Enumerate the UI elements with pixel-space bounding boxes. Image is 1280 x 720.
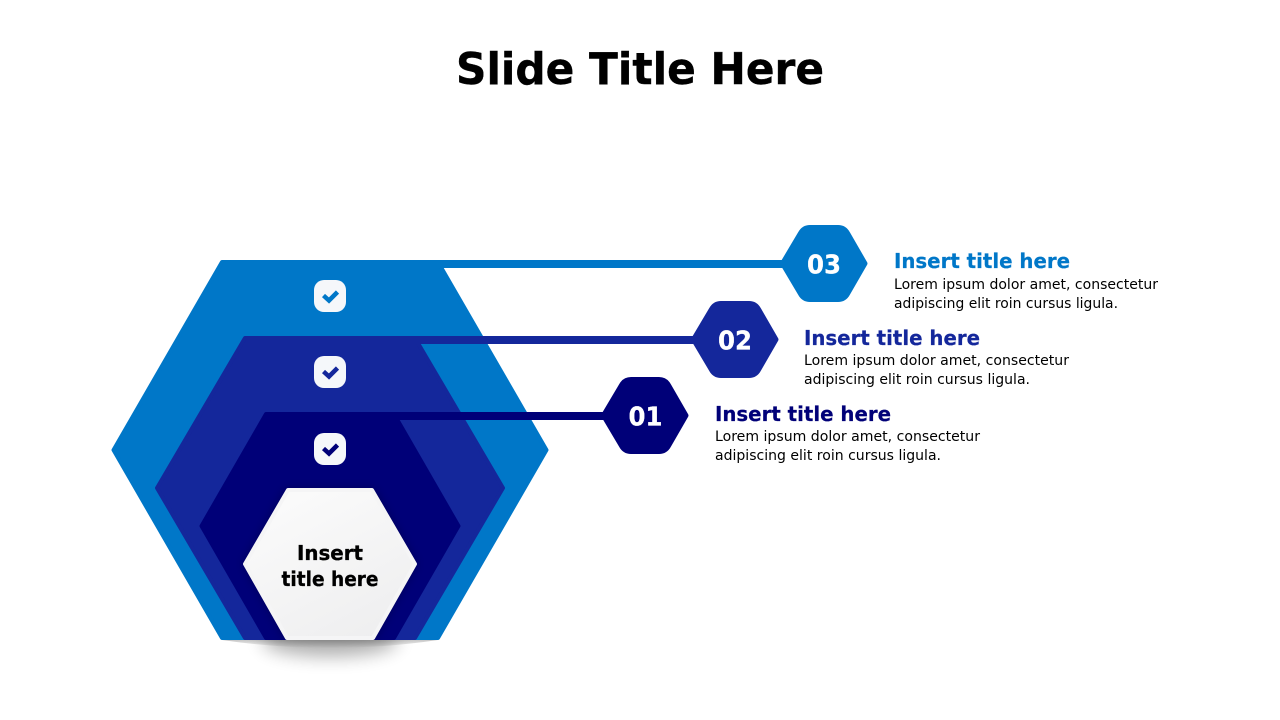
connector 02 xyxy=(410,336,700,344)
layer 02 hexagon xyxy=(157,338,503,638)
center label: Insert xyxy=(297,541,363,565)
connector 03 xyxy=(430,260,790,268)
body 02: adipiscing elit roin cursus ligula. xyxy=(804,372,1030,388)
icon: check 01 xyxy=(314,433,346,465)
layer 01 hexagon xyxy=(202,414,458,638)
item 02 xyxy=(410,301,1069,388)
item 01 xyxy=(390,377,980,464)
layer 03 hexagon xyxy=(114,262,546,638)
connector 01 xyxy=(390,412,610,420)
center hexagon xyxy=(244,489,416,640)
number 01: 01 xyxy=(628,402,662,432)
badge 01 xyxy=(601,377,688,454)
icon: check 03 xyxy=(314,280,346,312)
body 01: Lorem ipsum dolor amet, consectetur xyxy=(715,429,980,445)
base shadow xyxy=(222,640,438,667)
heading 01: Insert title here xyxy=(715,402,891,426)
badge 02 xyxy=(691,301,778,378)
body 02: Lorem ipsum dolor amet, consectetur xyxy=(804,353,1069,369)
heading 02: Insert title here xyxy=(804,326,980,350)
title: Slide Title Here xyxy=(456,44,824,95)
body 01: adipiscing elit roin cursus ligula. xyxy=(715,448,941,464)
body 03: Lorem ipsum dolor amet, consectetur xyxy=(894,277,1158,293)
body 03: adipiscing elit roin cursus ligula. xyxy=(894,296,1118,312)
icon: check 02 xyxy=(314,356,346,388)
heading 03: Insert title here xyxy=(894,249,1070,273)
center label: title here xyxy=(282,567,378,591)
hexagon diagram xyxy=(114,262,546,656)
number 02: 02 xyxy=(718,326,752,356)
badge 03 xyxy=(780,225,868,302)
number 03: 03 xyxy=(807,250,841,280)
item 03 xyxy=(430,225,1158,312)
